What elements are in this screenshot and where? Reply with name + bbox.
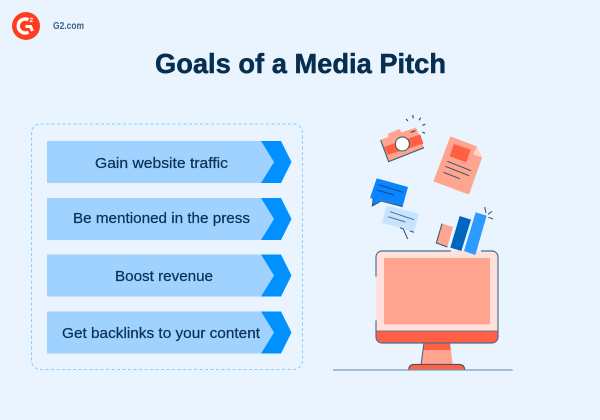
icon: document [433,136,482,195]
goal: be mentioned in the press [47,198,292,240]
goal: get backlinks: Get backlinks to your content [62,325,261,342]
monitor stand [409,343,465,370]
monitor body [376,251,498,343]
goal: boost revenue [47,254,292,296]
illustration: floating media icons [370,115,493,255]
goal: gain website traffic [47,141,292,183]
goal: be mentioned in the press: Be mentioned in the press [73,210,250,227]
title: Goals of a Media Pitch [155,48,446,79]
icon: blue speech bubble [370,178,408,207]
icon: camera [381,115,425,162]
icon: light speech bubble [382,206,419,239]
G2 logo: 2 [30,17,34,24]
goal: boost revenue: Boost revenue [115,268,213,285]
icon: bar chart [436,207,493,255]
desk line [333,368,513,372]
goal: get backlinks [47,312,292,354]
G2 logo [12,12,40,40]
panel: goals list [32,124,302,370]
illustration: computer monitor [333,251,513,370]
source label: G2.com [53,21,84,32]
goal: gain website traffic: Gain website traffic [95,155,229,172]
